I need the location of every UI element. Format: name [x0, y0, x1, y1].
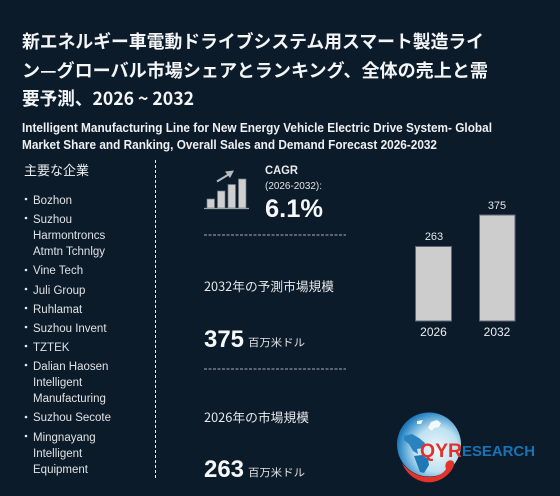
company list: Bozhon	[33, 195, 72, 207]
subtitle	[22, 121, 492, 152]
company list: Harmontroncs	[33, 230, 105, 242]
heading: key companies: 主要な企業	[24, 160, 89, 179]
stat: 2026 market size: 2026年の市場規模	[204, 407, 309, 426]
panel: key companies	[24, 160, 111, 476]
stat: 2026 market size: 百万米ドル	[248, 465, 305, 480]
subtitle: Intelligent Manufacturing Line for New Energy Vehicle Electric Drive System- Global	[22, 121, 492, 135]
stat: 2032 forecast market size: 百万米ドル	[248, 335, 305, 350]
stat: 2032 forecast market size	[204, 276, 334, 353]
company list: Suzhou Invent	[33, 323, 107, 335]
logo: QYResearch: ESEARCH	[462, 443, 535, 460]
company list: Ruhlamat	[33, 304, 83, 316]
stat: 2032 forecast market size: 375	[204, 326, 244, 353]
stat: 2032 forecast market size: 2032年の予測市場規模	[204, 276, 334, 295]
company list: Atmtn Tchnlgy	[33, 246, 105, 258]
company list: Intelligent	[33, 377, 83, 389]
bar chart: 263	[425, 231, 443, 243]
title: 新エネルギー車電動ドライブシステム用スマート製造ライ	[22, 28, 484, 54]
company list: Mingnayang	[33, 432, 96, 444]
bar chart: 2026	[420, 325, 447, 339]
logo: QYResearch	[397, 412, 535, 482]
title	[22, 28, 488, 111]
subtitle: Market Share and Ranking, Overall Sales and Demand Forecast 2026-2032	[22, 138, 437, 152]
CAGR block: CAGR	[265, 163, 298, 177]
title: ン—グローバル市場シェアとランキング、全体の売上と需	[22, 57, 488, 83]
bar chart: 2032	[484, 325, 511, 339]
bar chart: 375	[488, 200, 506, 212]
company list: Dalian Haosen	[33, 361, 108, 373]
company list: Suzhou Secote	[33, 412, 111, 424]
icon: growth chart	[204, 170, 249, 208]
company list: Intelligent	[33, 448, 83, 460]
stat: 2026 market size	[204, 407, 309, 483]
company list: Suzhou	[33, 214, 72, 226]
CAGR block	[265, 163, 323, 223]
bar chart	[416, 200, 515, 339]
CAGR block: (2026-2032):	[265, 181, 322, 192]
company list: Vine Tech	[33, 265, 83, 277]
company list: Juli Group	[33, 285, 85, 297]
company list: Manufacturing	[33, 393, 106, 405]
company list	[25, 195, 111, 476]
CAGR block: 6.1%	[265, 195, 323, 223]
company list: Equipment	[33, 464, 89, 476]
company list: TZTEK	[33, 342, 70, 354]
stat: 2026 market size: 263	[204, 456, 244, 483]
logo: QYResearch: QYR	[420, 440, 462, 462]
title: 要予測、2026 ~ 2032	[22, 85, 194, 111]
